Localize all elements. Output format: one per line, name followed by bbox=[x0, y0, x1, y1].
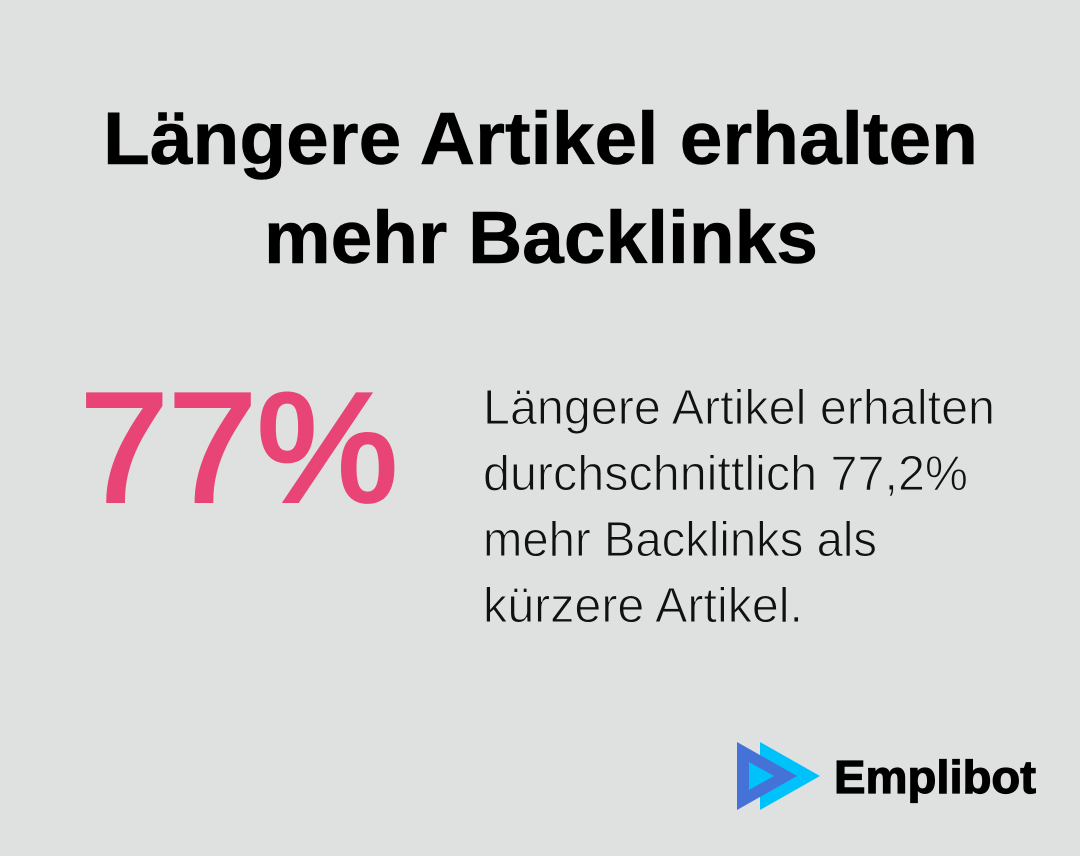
description text: mehr Backlinks als bbox=[483, 513, 877, 567]
statistic: 77%: 77% bbox=[80, 361, 398, 534]
description text: kürzere Artikel. bbox=[483, 579, 803, 633]
description text: Längere Artikel erhalten bbox=[483, 381, 995, 435]
title: mehr Backlinks bbox=[264, 196, 818, 279]
logo wordmark: Emplibot bbox=[834, 751, 1036, 803]
title bbox=[103, 97, 978, 279]
description text bbox=[483, 381, 995, 633]
description text: durchschnittlich 77,2% bbox=[483, 447, 968, 501]
title: Längere Artikel erhalten bbox=[103, 97, 978, 180]
icon: play triangles bbox=[737, 742, 820, 810]
logo: Emplibot bbox=[737, 742, 1036, 810]
